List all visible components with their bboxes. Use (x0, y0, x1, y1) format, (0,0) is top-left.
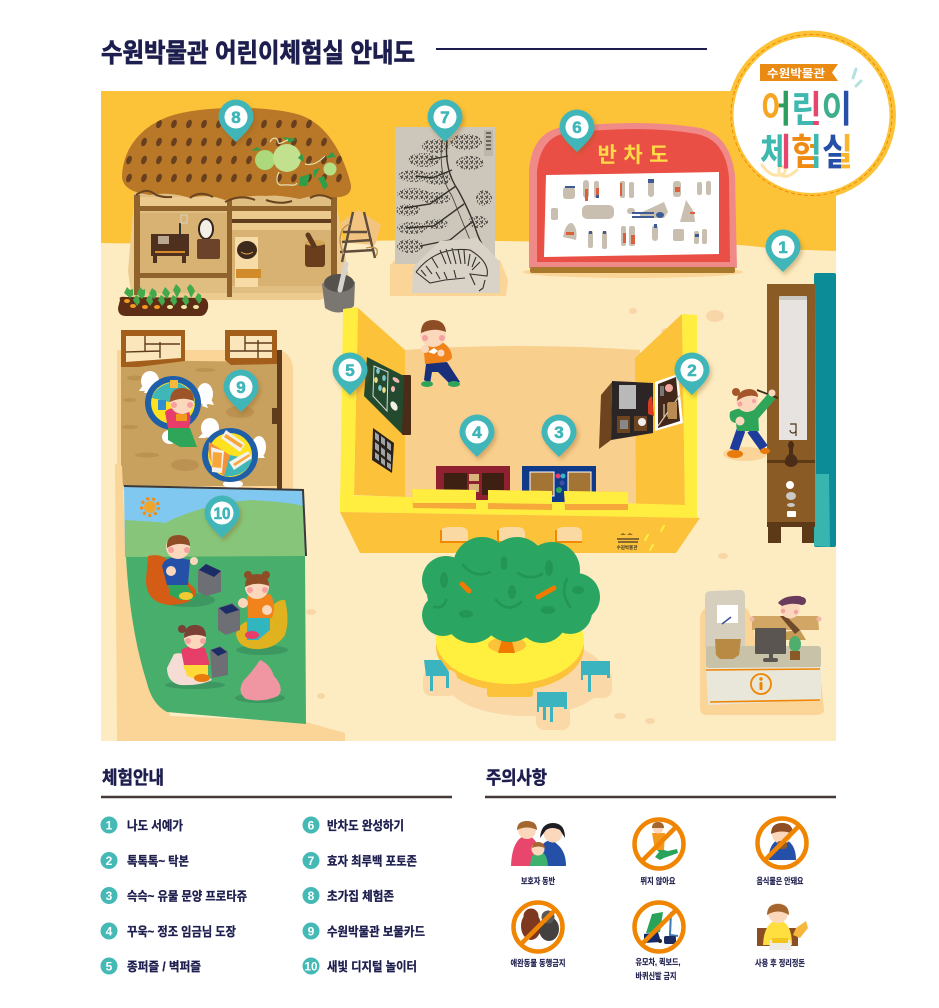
badge text line two: 체험실 (760, 132, 853, 173)
roof (122, 108, 351, 203)
table with map cards (145, 376, 201, 430)
pin 10 (204, 496, 240, 538)
shelf: calligraphy wall (767, 273, 836, 547)
label (636, 957, 680, 981)
shelf right (225, 330, 277, 365)
item 1 (100, 816, 183, 834)
ribbon (760, 64, 838, 81)
info icon (751, 674, 771, 694)
stools (139, 371, 266, 488)
item 2: 톡톡톡~ 탁본 (127, 854, 189, 868)
painting: tiger and tree (390, 127, 508, 296)
pin 8: 8 (231, 108, 241, 127)
item 4 (100, 922, 236, 940)
experience guide section (100, 768, 452, 974)
panel 4: stamp table (436, 466, 510, 500)
gourds on roof (251, 137, 336, 190)
pin 4 (460, 414, 494, 457)
label: 음식물은 안돼요 (756, 876, 804, 886)
label: 사용 후 정리정돈 (755, 958, 805, 968)
item 2: 2 (106, 854, 113, 868)
kiosk one (198, 564, 221, 596)
pin 4: 4 (472, 423, 482, 442)
kid with pink top (165, 625, 225, 689)
badge: children's experience room (727, 30, 896, 200)
item 9: 수원박물관 보물카드 (327, 924, 425, 939)
item 7: 7 (308, 854, 315, 868)
furniture: desk and mirror (151, 215, 325, 287)
item 6: 6 (308, 818, 315, 832)
pin 1: 1 (778, 238, 788, 257)
item 7 (302, 852, 417, 869)
badge text line one: 어린이 (761, 89, 852, 130)
monitor (755, 628, 786, 662)
icon: no pets (514, 902, 562, 952)
item 4: 4 (106, 924, 113, 938)
house: thatched cottage (122, 108, 351, 300)
basket (715, 639, 741, 659)
pin 2 (674, 352, 710, 395)
pin 6: 6 (572, 118, 582, 137)
item 6 (302, 816, 404, 834)
icon: family (511, 821, 566, 866)
label: 보호자 동반 (521, 876, 555, 886)
tree platform (422, 537, 607, 716)
left wall window grid (372, 428, 394, 473)
item 7: 효자 최루백 포토존 (327, 854, 417, 868)
icon: tidy up (757, 903, 808, 950)
exhibition building (340, 307, 700, 553)
kiosk three (210, 646, 228, 678)
right cabinet (599, 374, 683, 449)
label: 뛰지 않아요 (640, 876, 676, 886)
icon: no stroller (634, 902, 684, 952)
item 9: 9 (308, 924, 315, 938)
table with cards (202, 428, 258, 482)
icon: no running (634, 820, 684, 868)
map panel (101, 91, 836, 741)
cushions (412, 489, 628, 510)
tripod frame (340, 210, 381, 262)
item 5 (100, 958, 201, 974)
stone mortar (322, 264, 355, 313)
cautions section (485, 768, 836, 981)
pin 5: 5 (345, 361, 355, 380)
heading: 주의사항 (486, 768, 547, 788)
pin 2: 2 (687, 361, 697, 380)
front arches (441, 527, 582, 541)
item 1: 1 (106, 818, 113, 832)
label: 유모차, 퀵보드, (636, 957, 680, 967)
pin 9: 9 (236, 378, 246, 397)
item 8: 초가집 체험존 (327, 888, 394, 904)
pin 7: 7 (440, 108, 450, 127)
item 10: 10 (304, 960, 318, 974)
item 4: 꾸욱~ 정조 임금님 도장 (127, 925, 236, 939)
icon: no food (758, 818, 806, 868)
canopy (422, 537, 600, 643)
item 3: 슥슥~ 유물 문양 프로타쥬 (127, 890, 247, 904)
item 9 (302, 922, 425, 940)
kiosk two (218, 603, 240, 635)
kid with blue sweater (146, 535, 215, 607)
item 3: 3 (106, 889, 113, 903)
left board: puzzle (364, 357, 411, 435)
pin 8 (218, 100, 254, 142)
item 5: 종퍼즐 / 벽퍼즐 (127, 960, 201, 974)
boy in orange (420, 320, 460, 387)
item 8: 8 (308, 889, 315, 903)
room 10: digital playground (115, 464, 345, 741)
item 2 (100, 852, 189, 869)
pin 7 (428, 100, 462, 142)
museum logo (617, 533, 639, 551)
cactus (789, 636, 801, 660)
infographic (100, 30, 896, 980)
room 9: wood floor (117, 330, 293, 500)
pin 5 (332, 352, 368, 395)
pink beanbag (235, 660, 285, 703)
information desk (700, 590, 824, 715)
item 5: 5 (106, 960, 113, 974)
item 3 (100, 887, 247, 904)
item 6: 반차도 완성하기 (327, 818, 404, 833)
museum logo: 수원박물관 (617, 544, 637, 551)
item 8 (302, 887, 394, 904)
pin 9 (224, 370, 258, 412)
board: banchado (523, 123, 743, 278)
board heading: 반 차 도 (598, 144, 668, 167)
item 10 (302, 958, 417, 974)
panel 3: frottage table (522, 466, 596, 502)
pin 1 (766, 230, 800, 272)
item 1: 나도 서예가 (127, 818, 183, 833)
label: 애완동물 동행금지 (510, 958, 566, 968)
shelf left (121, 330, 185, 367)
board panel with artifacts (544, 172, 719, 257)
title: 수원박물관 어린이체험실 안내도 (101, 38, 415, 68)
staff member (750, 596, 822, 640)
kid with orange top (236, 571, 288, 655)
pin 10: 10 (214, 504, 230, 523)
pin 3 (542, 414, 576, 457)
ribbon: 수원박물관 (767, 66, 825, 80)
item 10: 새빛 디지털 놀이터 (327, 960, 417, 974)
teal stools (423, 660, 612, 730)
sun (142, 498, 158, 516)
tiger stone (412, 238, 500, 293)
carrot garden (118, 284, 208, 316)
seated girl (165, 388, 197, 447)
pin 3: 3 (554, 423, 564, 442)
pin 6 (560, 110, 594, 152)
girl with brush (723, 388, 778, 461)
label: 바퀴신발 금지 (636, 971, 676, 981)
heading: 체험안내 (102, 768, 164, 788)
